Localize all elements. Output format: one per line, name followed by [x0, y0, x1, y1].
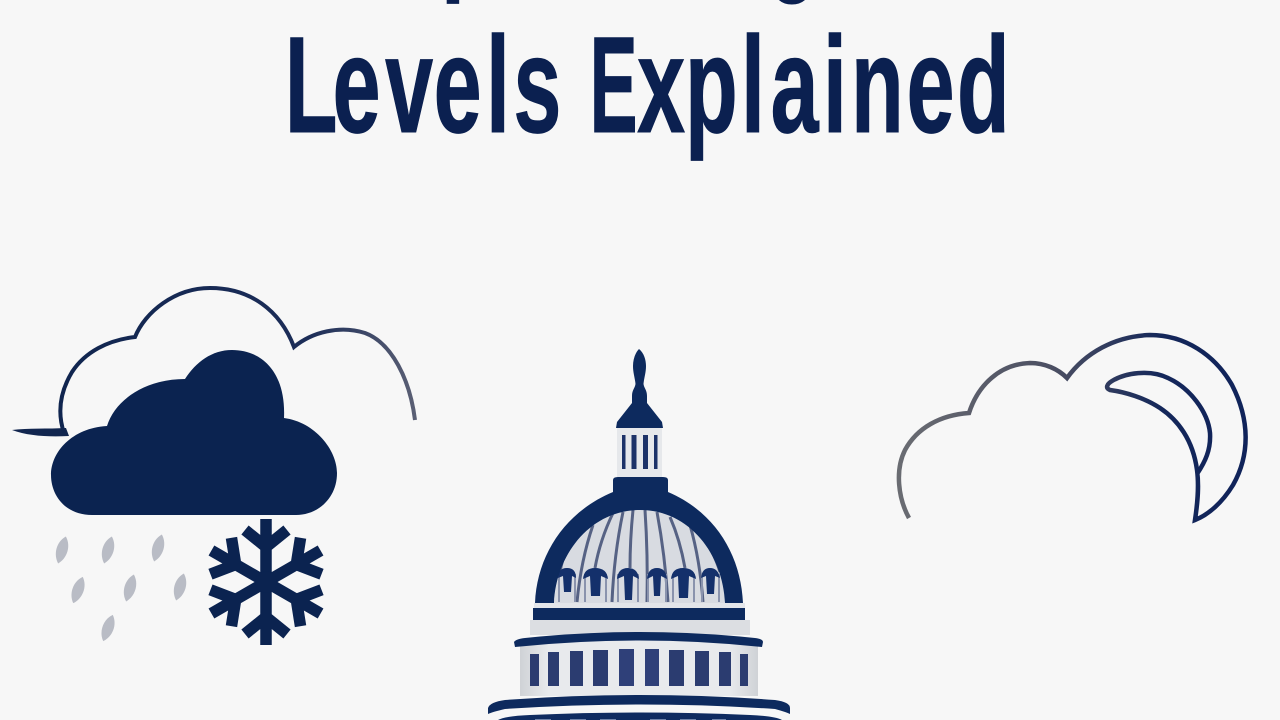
snowflake	[201, 519, 331, 645]
title: Levels	[285, 9, 584, 162]
icon: capitol dome	[488, 349, 790, 720]
lower cornice	[488, 695, 790, 714]
dome base bands	[530, 603, 750, 635]
solid cloud	[51, 350, 337, 515]
lantern	[617, 428, 662, 478]
arched windows	[558, 568, 720, 602]
dome ribs	[560, 510, 720, 602]
upper cornice	[514, 632, 763, 647]
dome arch	[535, 477, 743, 603]
title	[285, 0, 1010, 162]
icon: cloud and crescent moon	[899, 335, 1246, 520]
cloud outline	[12, 288, 415, 436]
rain drops	[53, 533, 189, 643]
title: xplained	[637, 9, 1010, 162]
icon: snow cloud	[12, 288, 415, 645]
dome	[535, 477, 743, 604]
drum with windows	[520, 640, 758, 696]
base tier	[498, 712, 782, 720]
finial	[616, 349, 663, 428]
title: E	[590, 9, 638, 162]
